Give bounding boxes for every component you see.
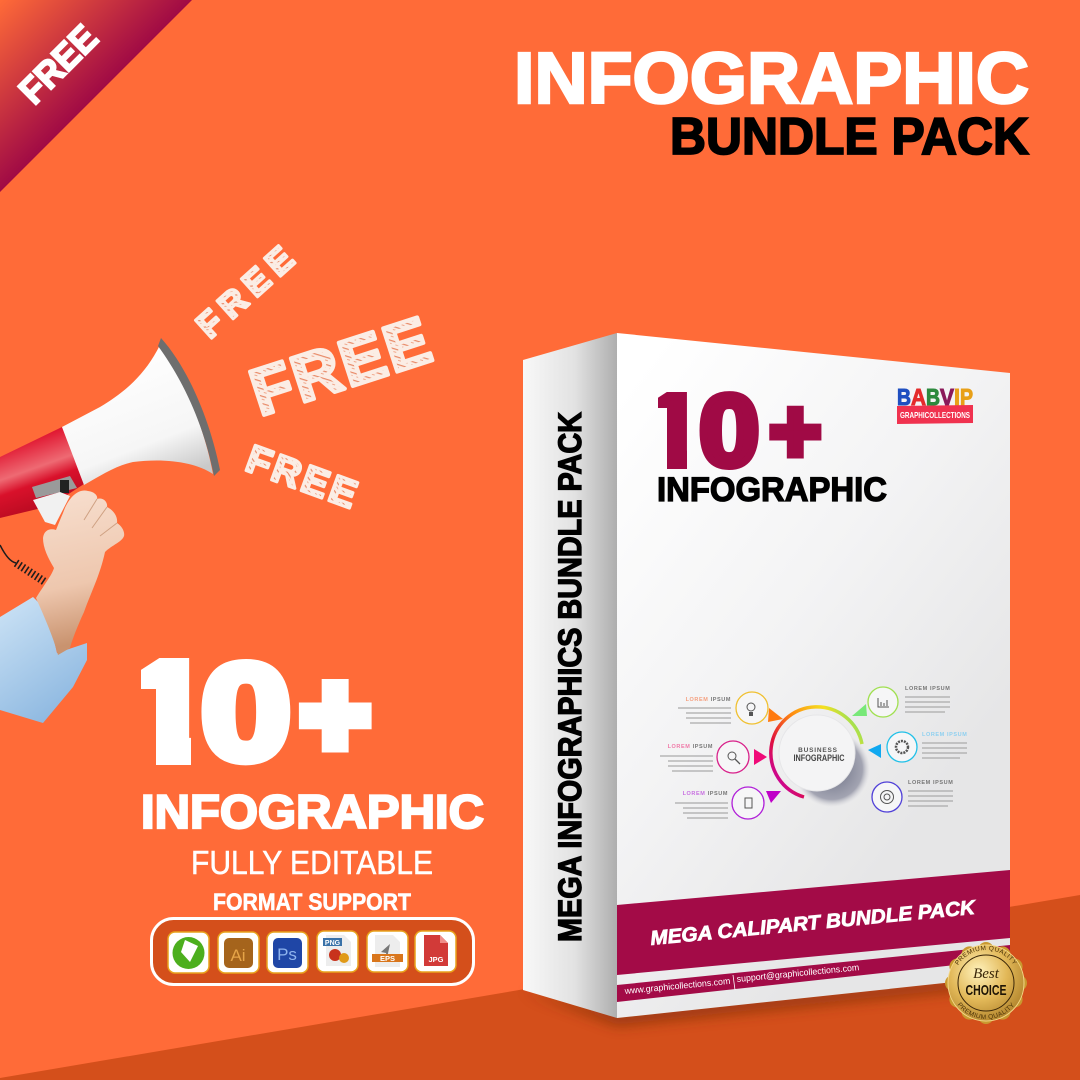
maroon band — [617, 870, 1010, 975]
hand — [36, 490, 124, 655]
node: target — [872, 780, 953, 812]
FREE words: FREE — [241, 302, 439, 430]
icon: JPG: JPG — [428, 955, 444, 964]
hub circle — [771, 707, 870, 807]
arrows — [754, 704, 881, 803]
hub circle: INFOGRAPHIC — [794, 753, 845, 763]
sleeve — [0, 597, 87, 723]
horn rim — [158, 338, 220, 476]
corner ribbon: FREE: FREE — [11, 17, 106, 112]
node: chart: LOREM IPSUM — [905, 686, 950, 692]
best choice badge: PREMIUM QUALITY — [958, 1002, 1014, 1020]
logo: P — [960, 384, 973, 410]
icon: Illustrator: Ai — [230, 946, 246, 965]
icon: CorelDraw — [168, 932, 209, 973]
finger creases — [84, 499, 117, 536]
logo: B — [926, 384, 940, 410]
title — [514, 39, 1029, 166]
maroon band: MEGA CALIPART BUNDLE PACK — [649, 897, 978, 950]
node: document: LOREM IPSUM — [683, 791, 728, 797]
best choice badge: PREMIUM QUALITY — [954, 946, 1018, 965]
logo — [897, 384, 973, 424]
logo: B — [897, 384, 911, 410]
FREE words: FREE — [189, 239, 301, 346]
hub circle: BUSINESS — [798, 747, 838, 754]
box front face — [617, 333, 1010, 1018]
icon: Illustrator — [218, 932, 259, 973]
contact strip: support@graphicollections.com — [736, 962, 860, 984]
node: chart — [868, 686, 950, 717]
handle — [32, 476, 77, 525]
title: BUNDLE PACK — [670, 108, 1029, 166]
format support panel — [152, 918, 474, 984]
logo: A — [911, 384, 926, 410]
mini infographic — [660, 686, 967, 819]
node: bulb: LOREM IPSUM — [686, 697, 731, 703]
icon: PNG — [317, 931, 358, 972]
10+ headline group: + — [301, 648, 369, 780]
logo: I — [954, 384, 960, 410]
cord — [0, 545, 45, 582]
dark floor band — [0, 895, 1080, 1080]
10+ headline group: 1 — [130, 636, 207, 790]
logo: V — [940, 384, 955, 410]
10+ headline group: FORMAT SUPPORT — [213, 889, 411, 916]
node: bulb — [678, 692, 768, 724]
corner ribbon: FREE — [0, 0, 192, 192]
icon: PNG: PNG — [325, 940, 341, 947]
10+ headline group: INFOGRAPHIC — [141, 785, 484, 838]
best choice badge: Best — [973, 966, 1000, 982]
best choice badge — [945, 942, 1027, 1024]
node: search: LOREM IPSUM — [668, 744, 713, 750]
front 10+ heading: 1 — [645, 376, 701, 488]
icon: Photoshop — [267, 932, 308, 973]
FREE words: FREE — [241, 438, 362, 517]
megaphone and hand illustration — [0, 338, 220, 723]
icon: EPS — [367, 931, 408, 972]
10+ headline group — [141, 658, 484, 910]
icon: JPG — [415, 931, 456, 972]
node: target: LOREM IPSUM — [908, 780, 953, 786]
contact strip — [617, 945, 1010, 1002]
node: document — [675, 787, 764, 819]
front 10+ heading: INFOGRAPHIC — [657, 471, 887, 509]
10+ headline group: 0 — [201, 636, 291, 788]
title: INFOGRAPHIC — [514, 39, 1029, 119]
logo: GRAPHICOLLECTIONS — [900, 410, 970, 420]
side title: MEGA INFOGRAPHICS BUNDLE PACK — [552, 412, 588, 942]
scalloped edge — [945, 942, 1027, 1024]
box side face — [523, 333, 617, 1018]
node: gear: LOREM IPSUM — [922, 732, 967, 738]
contact strip: www.graphicollections.com — [623, 976, 731, 996]
front 10+ heading — [658, 391, 887, 502]
front 10+ heading: + — [769, 382, 822, 482]
10+ headline group: FULLY EDITABLE — [191, 844, 433, 881]
product box — [523, 333, 1010, 1018]
icon: EPS: EPS — [380, 954, 395, 963]
box floor shadow — [523, 975, 1010, 1025]
front 10+ heading: 0 — [699, 376, 760, 488]
horn — [62, 345, 213, 485]
node: gear — [887, 732, 967, 762]
node: search — [660, 741, 749, 773]
FREE words — [189, 239, 439, 517]
best choice badge: CHOICE — [966, 982, 1006, 999]
icon: Photoshop: Ps — [277, 945, 297, 964]
red body — [0, 427, 84, 518]
